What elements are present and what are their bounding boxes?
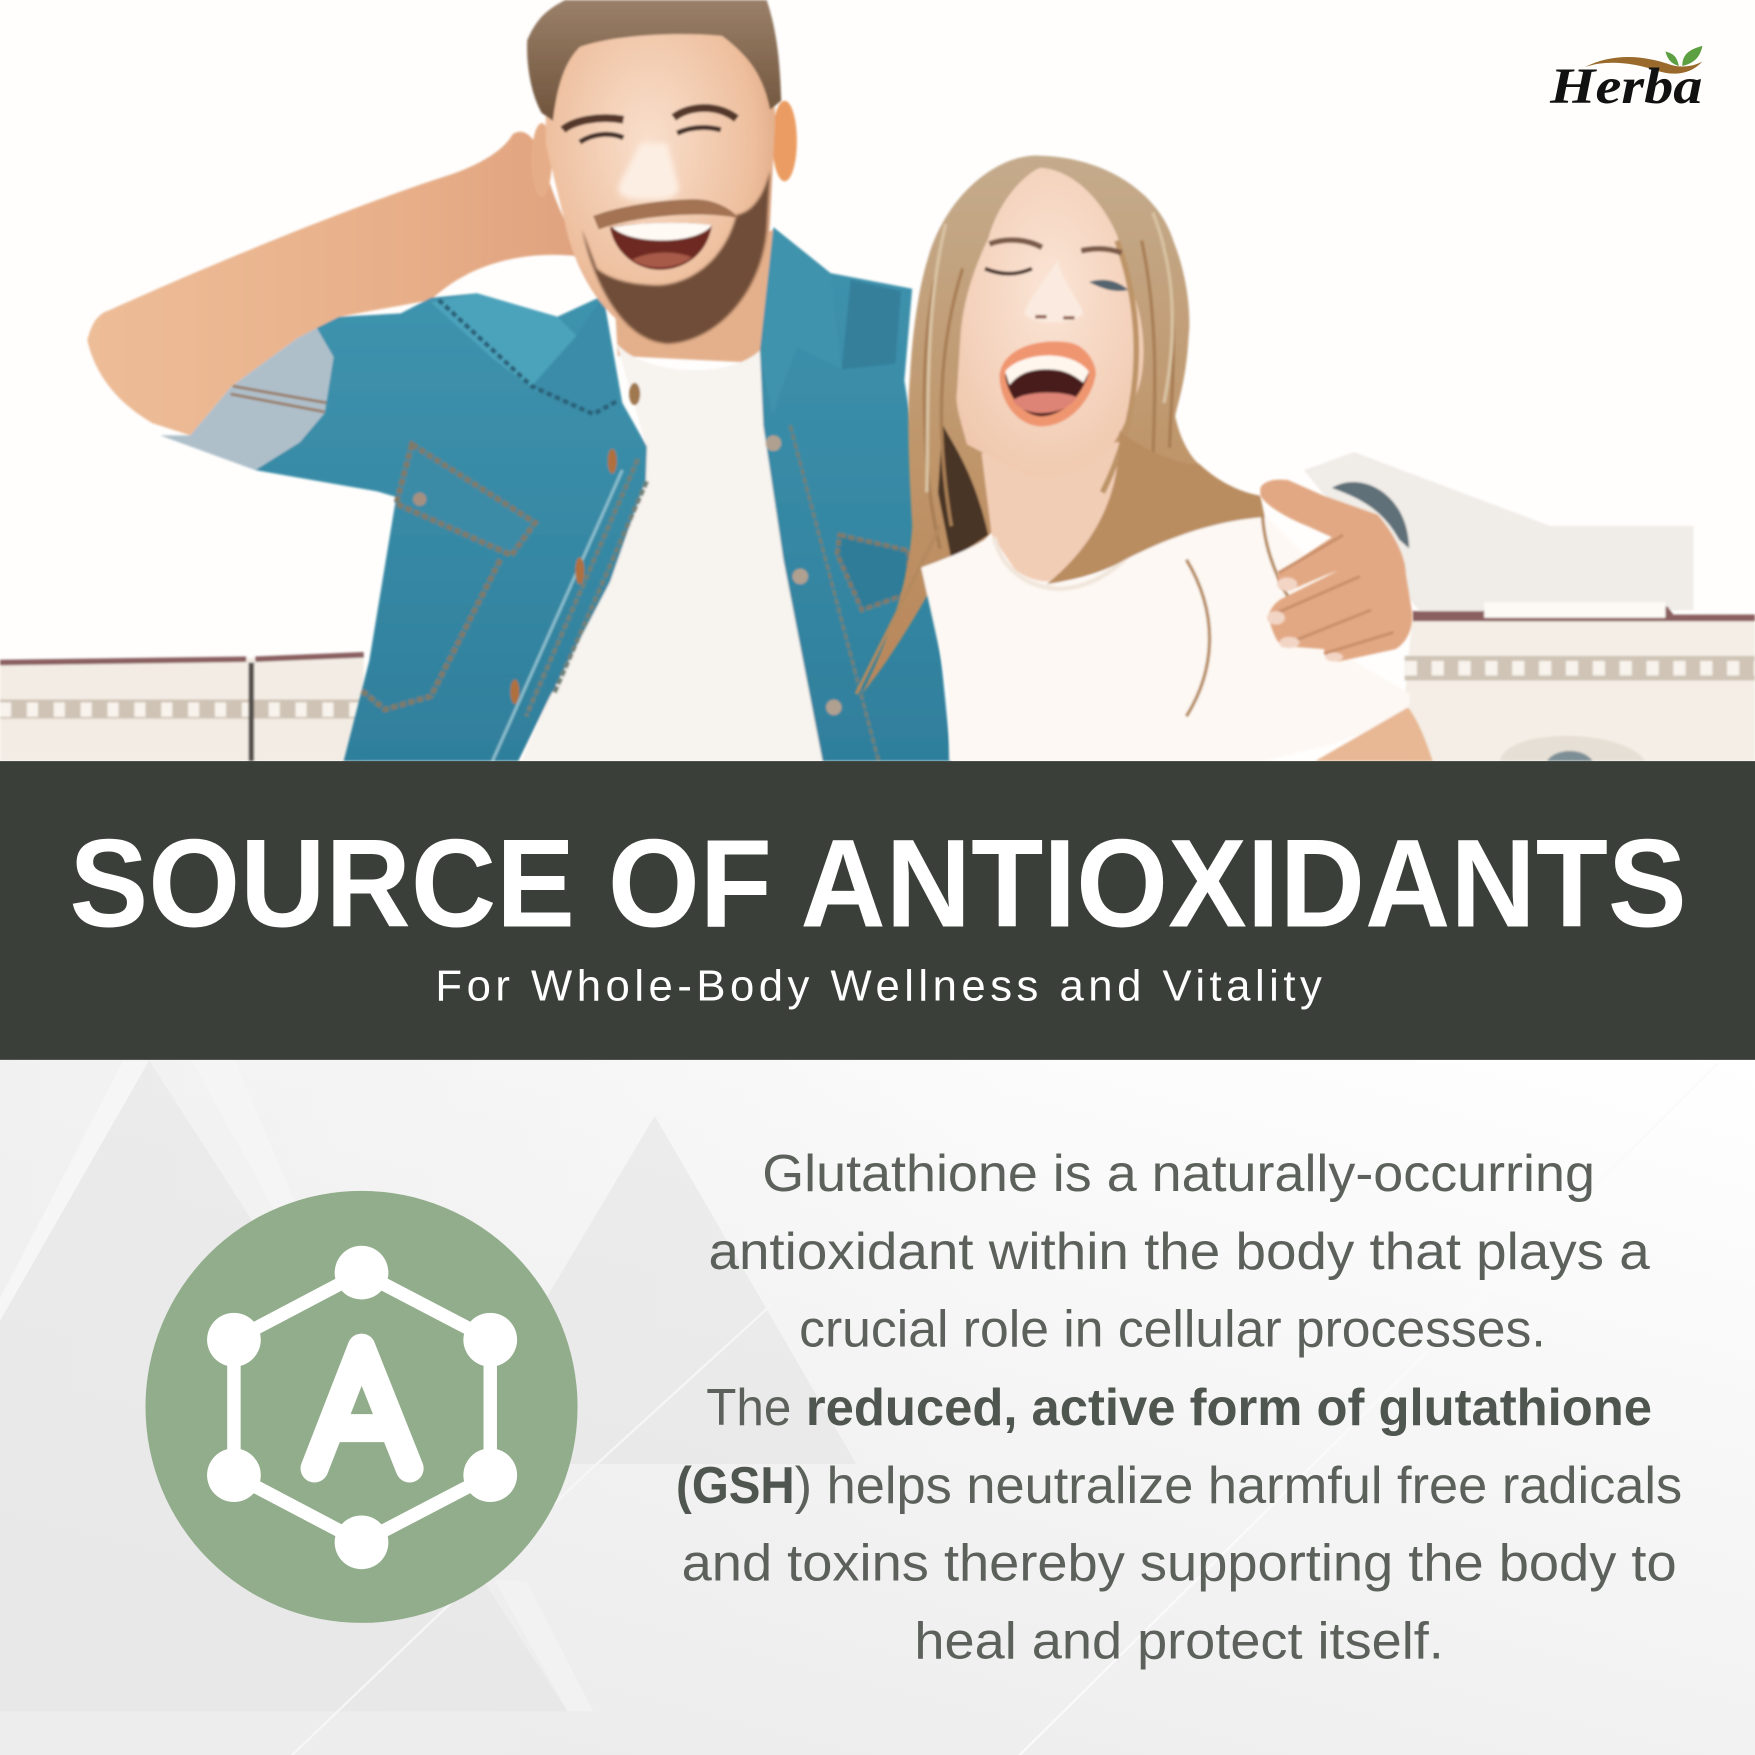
placket stitching [526,459,647,716]
right pocket [837,535,909,610]
text block: glutathione description: antioxidant within the body that plays a [708,1222,1650,1280]
eyes and brows [989,240,1042,247]
hair strands over the face [1102,241,1136,492]
logo: Herba: Herba [1549,58,1702,114]
man's hand on shoulder [1260,480,1413,661]
man [87,0,951,761]
title: SOURCE OF ANTIOXIDANTS [69,814,1687,954]
stray hair [856,515,1304,716]
mustache [593,199,739,229]
text block: glutathione description: (GSH [676,1456,795,1514]
open mouth [999,341,1096,426]
text block: glutathione description: heal and protect itself. [914,1612,1444,1670]
text block: glutathione description: ) helps neutralize harmful free radicals [795,1456,1682,1514]
jacket right side [760,227,951,761]
hair [527,0,781,121]
buttons [413,492,426,506]
text block: glutathione description: crucial role in cellular processes. [799,1299,1546,1357]
t-shirt [921,515,1410,761]
lower panel background [0,1060,1755,1755]
hair falling over shoulder [1047,431,1265,584]
neck [613,229,775,364]
beard [582,170,770,344]
background buildings [0,452,1755,761]
jacket sleeve and left side [255,293,647,761]
text block: glutathione description: and toxins thereby supporting the body to [682,1533,1677,1591]
band: dark title banner [0,761,1755,1060]
collars [532,295,618,414]
open mouth [610,223,712,270]
face [956,168,1143,477]
ears [772,101,797,181]
text block: glutathione description [676,1144,1682,1670]
subtitle: For Whole-Body Wellness and Vitality [435,962,1322,1011]
breast pocket [396,444,535,555]
shadow under hair [938,424,988,560]
icon: antioxidant hexagon molecule [146,1191,578,1623]
text block: glutathione description: Glutathione is a naturally-occurring [762,1144,1595,1202]
text block: glutathione description: reduced, active form of glutathione [806,1378,1652,1436]
arm raised behind head [87,132,588,435]
t-shirt [522,344,823,761]
arm [1315,707,1433,761]
hair [862,156,1265,694]
sleeve cuff [160,328,334,470]
woman [856,156,1433,761]
shoulder light patch [431,293,576,392]
eyes and brows [563,118,623,130]
neck [982,442,1146,581]
face [546,7,775,341]
nose [1024,260,1083,323]
collar [994,531,1148,589]
text block: glutathione description: The [706,1378,791,1436]
nose highlight [618,143,679,200]
photo: smiling couple [0,0,1755,761]
